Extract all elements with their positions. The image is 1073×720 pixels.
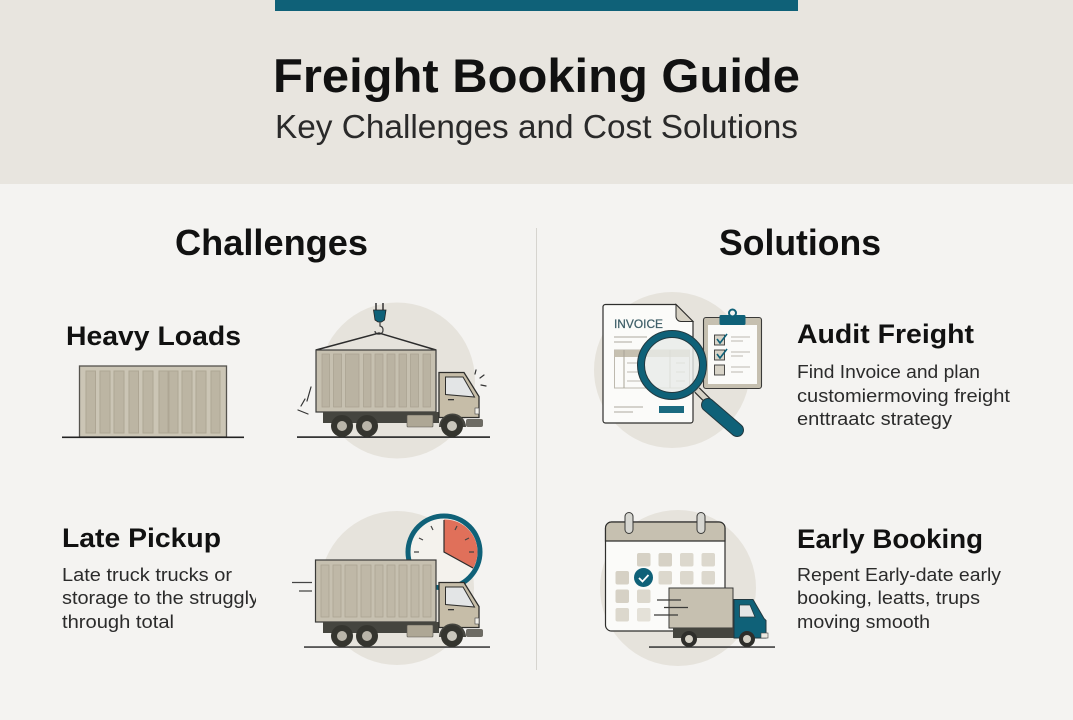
text: early booking description [797,564,1002,632]
text: early booking description: moving smooth [797,611,930,632]
panel: heavy loads [62,321,244,438]
wheels [334,418,460,434]
cargo box [316,560,436,622]
invoice page: INVOICE [614,317,663,331]
text: audit description: customiermoving freight [797,385,1010,406]
magnifying glass [638,330,737,430]
heading: Heavy Loads: Heavy Loads [66,321,241,351]
text: audit description: Find Invoice and plan [797,361,980,382]
text: audit description: enttraatc strategy [797,408,953,429]
wheels [334,628,460,644]
crane hook [316,303,436,350]
icon: calendar with truck [600,510,775,666]
clock [408,516,480,588]
panel: audit freight [797,319,1010,429]
cab [439,372,483,427]
heading: Challenges: Challenges [175,222,368,263]
text: late pickup description: through total [62,611,174,632]
heading: Early Booking: Early Booking [797,524,983,554]
cargo box [316,350,436,412]
heading: Late Pickup: Late Pickup [62,523,221,553]
panel: late pickup [62,523,262,632]
cab [439,582,483,637]
text: audit description [797,361,1010,429]
top accent bar [275,0,798,11]
clipboard [704,310,762,388]
icon: invoice audit [594,292,762,448]
heading: Solutions: Solutions [719,222,881,263]
text: late pickup description [62,564,262,632]
icon: container [62,366,244,438]
text: late pickup description: storage to the struggly [62,587,260,608]
invoice page [603,304,693,423]
delivery truck [654,588,768,645]
chassis [323,622,439,637]
icon: late truck with clock [292,511,490,665]
text: early booking description: booking, leatts, trups [797,587,980,608]
speed lines [292,582,312,591]
subtitle: Key Challenges and Cost Solutions [275,108,798,145]
calendar [606,512,725,631]
title: Freight Booking Guide [273,49,800,102]
text: late pickup description: Late truck trucks or [62,564,232,585]
text: early booking description: Repent Early-date early [797,564,1002,585]
icon: truck lifted by crane [297,302,490,458]
chassis [323,412,439,427]
header band [0,0,1073,184]
shake lines [298,370,486,414]
panel: early booking [797,524,1002,632]
heading: Audit Freight: Audit Freight [797,319,974,349]
